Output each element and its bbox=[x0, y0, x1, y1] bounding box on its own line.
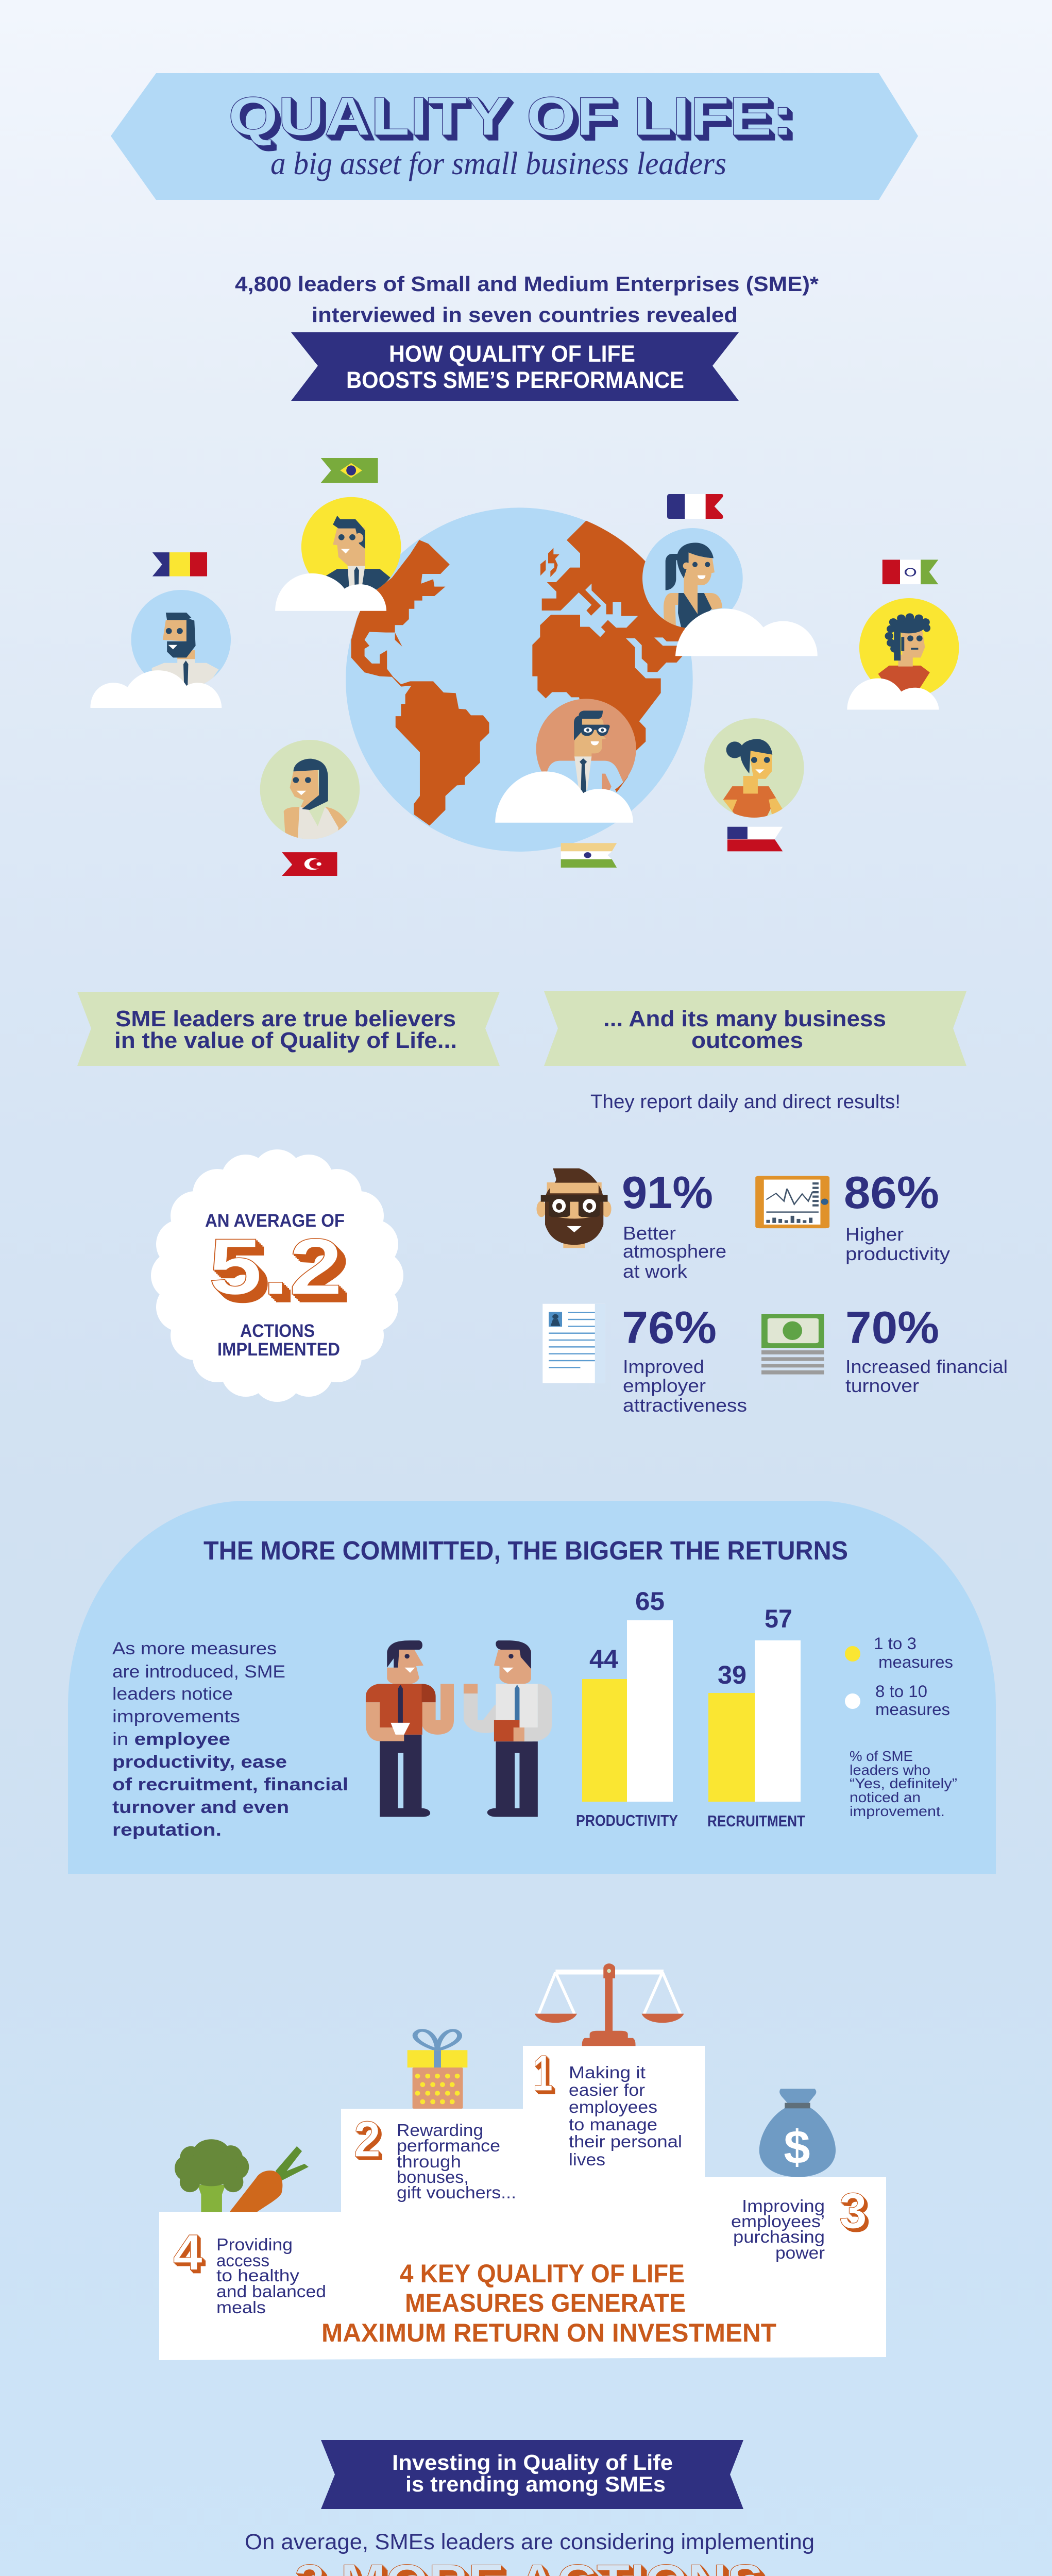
measure 3 text: employees’ bbox=[731, 2212, 825, 2231]
ribbon: how quality of life boosts performance bbox=[291, 332, 739, 401]
stat: 70% increased financial turnover: turnover bbox=[845, 1375, 919, 1396]
icon: money bag bbox=[759, 2089, 836, 2177]
banner: SME leaders are true believers: SME leaders are true believers bbox=[115, 1006, 456, 1031]
ribbon: investing in quality of life: Investing in Quality of Life bbox=[392, 2450, 673, 2475]
body text: reputation. bbox=[112, 1820, 222, 1840]
trend statement: On average, SMEs leaders are considering implementing bbox=[245, 2530, 815, 2554]
numeral 1: 1 bbox=[533, 2045, 553, 2102]
bar chart: 44 bbox=[589, 1645, 618, 1673]
bar chart: 57 bbox=[765, 1604, 792, 1633]
stat: 91% better atmosphere: at work bbox=[623, 1261, 688, 1282]
measure 1 text: their personal bbox=[569, 2132, 682, 2151]
legend bbox=[845, 1634, 953, 1719]
intro text: interviewed in seven countries revealed bbox=[312, 303, 738, 327]
flag: Mexico bbox=[883, 560, 938, 584]
intro text: 4,800 leaders of Small and Medium Enterprises (SME)* bbox=[235, 272, 819, 296]
ribbon: investing in quality of life bbox=[321, 2440, 743, 2509]
icon: banknote and stack bbox=[761, 1314, 824, 1375]
legend: measures bbox=[875, 1700, 950, 1719]
podium headline: 4 KEY QUALITY OF LIFE bbox=[400, 2259, 685, 2288]
icon: gift box bbox=[408, 2030, 467, 2109]
panel heading: THE MORE COMMITTED, THE BIGGER THE RETURNS bbox=[203, 1536, 848, 1565]
portrait: India bbox=[495, 699, 636, 868]
stat: 70% increased financial turnover bbox=[845, 1302, 1008, 1396]
bar chart bbox=[576, 1587, 805, 1830]
flag: Turkey bbox=[282, 852, 337, 876]
cloud bbox=[91, 670, 222, 708]
body text: improvements bbox=[112, 1707, 240, 1726]
measure 2 text: through bbox=[397, 2152, 461, 2171]
stat: 76% improved employer attractiveness: Improved bbox=[623, 1356, 704, 1377]
cloud badge: 5.2 actions implemented: IMPLEMENTED bbox=[217, 1340, 340, 1360]
banner: and its many business outcomes: ... And its many business bbox=[603, 1006, 886, 1031]
measure 2 text bbox=[397, 2121, 516, 2202]
chart note: noticed an bbox=[850, 1789, 921, 1805]
portrait: Romania bbox=[91, 552, 231, 708]
body text: As more measures bbox=[112, 1639, 277, 1658]
numeral 2: 2 bbox=[354, 2111, 381, 2167]
banner: SME leaders are true believers: in the value of Quality of Life... bbox=[114, 1028, 457, 1053]
icon: tablet with chart bbox=[755, 1176, 829, 1228]
body text: turnover and even bbox=[112, 1798, 289, 1817]
measure 3 text: power bbox=[775, 2243, 825, 2262]
globe bbox=[346, 507, 693, 852]
icon: bearded man with glasses bbox=[536, 1168, 612, 1248]
portrait: Brazil bbox=[275, 458, 401, 611]
banner: and its many business outcomes: outcomes bbox=[691, 1028, 803, 1053]
stat: 91% better atmosphere: atmosphere bbox=[623, 1241, 726, 1262]
portrait: Chile bbox=[704, 718, 804, 851]
legend: 8 to 10 bbox=[875, 1682, 927, 1701]
portrait: Mexico bbox=[847, 560, 959, 709]
flag: France bbox=[667, 494, 723, 519]
stat: 86% higher productivity: Higher bbox=[845, 1224, 904, 1245]
measure 2 text: bonuses, bbox=[397, 2167, 469, 2187]
body text: are introduced, SME bbox=[112, 1662, 285, 1682]
stat: 76% improved employer attractiveness: 76% bbox=[622, 1302, 717, 1353]
chart note: % of SME bbox=[850, 1748, 913, 1764]
banner: and its many business outcomes bbox=[544, 991, 966, 1066]
numeral 4: 4 bbox=[173, 2224, 202, 2281]
podium headline: MEASURES GENERATE bbox=[405, 2289, 686, 2317]
chart note: “Yes, definitely” bbox=[850, 1775, 957, 1791]
banner: SME leaders are true believers bbox=[77, 992, 500, 1066]
measure 1 text: employees bbox=[569, 2097, 657, 2116]
body text: leaders notice bbox=[112, 1684, 233, 1704]
body text: of recruitment, financial bbox=[112, 1775, 348, 1794]
figure: 5.2: 5.2 bbox=[209, 1222, 343, 1311]
stat: 86% higher productivity: 86% bbox=[844, 1167, 939, 1218]
measure 4 text: to healthy bbox=[216, 2266, 300, 2285]
left man bbox=[366, 1640, 454, 1817]
subtitle: a big asset for small business leaders bbox=[270, 146, 726, 181]
podium headline bbox=[321, 2259, 776, 2347]
stat: 76% improved employer attractiveness: employer bbox=[623, 1375, 706, 1396]
chart note bbox=[850, 1748, 957, 1819]
title banner bbox=[111, 73, 918, 200]
illustration: two businessmen bbox=[366, 1640, 552, 1817]
flag: Romania bbox=[152, 552, 207, 577]
ribbon: how quality of life boosts performance: HOW QUALITY OF LIFE bbox=[389, 341, 635, 367]
measure 1 text: easier for bbox=[569, 2080, 645, 2099]
legend: 1 to 3 bbox=[874, 1634, 917, 1653]
flag: Chile bbox=[727, 827, 783, 851]
stat: 76% improved employer attractiveness: attractiveness bbox=[623, 1395, 747, 1416]
bar chart: 39 bbox=[718, 1660, 746, 1689]
measure 3 text: purchasing bbox=[733, 2227, 825, 2246]
stat: 91% better atmosphere bbox=[622, 1167, 726, 1282]
bar chart: RECRUITMENT bbox=[707, 1812, 805, 1830]
world map with seven country portraits bbox=[91, 458, 959, 876]
stat: 91% better atmosphere: Better bbox=[623, 1223, 676, 1244]
measure 4 text bbox=[216, 2235, 326, 2317]
measure 2 text: gift vouchers... bbox=[397, 2183, 516, 2202]
legend: measures bbox=[878, 1653, 953, 1671]
measure 1 text: lives bbox=[569, 2150, 605, 2169]
cloud bbox=[275, 573, 386, 611]
measure 4 text: access bbox=[216, 2251, 269, 2270]
stat: 86% higher productivity bbox=[844, 1167, 950, 1264]
stat: 76% improved employer attractiveness bbox=[622, 1302, 747, 1416]
stat: 70% increased financial turnover: 70% bbox=[845, 1302, 939, 1353]
intro text bbox=[235, 272, 819, 327]
body text: productivity, ease bbox=[112, 1752, 287, 1772]
bar chart: PRODUCTIVITY bbox=[576, 1811, 678, 1829]
icon: scales bbox=[535, 1963, 684, 2046]
chart note: improvement. bbox=[850, 1803, 945, 1819]
measure 1 text: to manage bbox=[569, 2115, 657, 2134]
cloud bbox=[847, 679, 939, 709]
flag: Brazil bbox=[321, 458, 378, 483]
cloud bbox=[495, 771, 633, 823]
measure 3 text bbox=[731, 2196, 825, 2262]
bar chart: 65 bbox=[635, 1587, 665, 1616]
measure 4 text: meals bbox=[216, 2298, 266, 2317]
cloud badge: 5.2 actions implemented: ACTIONS bbox=[240, 1321, 315, 1341]
ribbon: investing in quality of life: is trending among SMEs bbox=[405, 2472, 666, 2496]
title: Quality of Life: QUALITY OF LIFE: bbox=[228, 86, 793, 147]
measure 1 text: Making it bbox=[569, 2063, 646, 2082]
ribbon: how quality of life boosts performance: BOOSTS SME’S PERFORMANCE bbox=[346, 367, 684, 393]
measure 3 text: Improving bbox=[742, 2196, 825, 2215]
chart note: leaders who bbox=[850, 1762, 930, 1778]
podium: four key measures bbox=[159, 1963, 886, 2360]
subheading: they report results: They report daily and direct results! bbox=[590, 1091, 901, 1113]
cloud badge: 5.2 actions implemented: AN AVERAGE OF bbox=[205, 1211, 345, 1231]
icon: resume document bbox=[542, 1304, 605, 1383]
podium headline: MAXIMUM RETURN ON INVESTMENT bbox=[321, 2318, 776, 2347]
numeral 3: 3 bbox=[839, 2182, 867, 2239]
portrait: Turkey bbox=[260, 740, 360, 876]
cloud bbox=[675, 608, 818, 656]
flag: India bbox=[561, 843, 617, 868]
measure 2 text: performance bbox=[397, 2136, 500, 2155]
cloud badge: 5.2 actions implemented bbox=[151, 1149, 403, 1402]
measure 2 text: Rewarding bbox=[397, 2121, 483, 2140]
body text bbox=[112, 1639, 348, 1840]
icon: broccoli and carrot bbox=[175, 2139, 309, 2212]
right man bbox=[464, 1640, 552, 1817]
body text: in employee bbox=[112, 1730, 230, 1749]
measure 4 text: and balanced bbox=[216, 2282, 326, 2301]
stat: 70% increased financial turnover: Increased financial bbox=[845, 1356, 1008, 1377]
stat: 86% higher productivity: productivity bbox=[845, 1243, 950, 1264]
stat: 91% better atmosphere: 91% bbox=[622, 1167, 713, 1218]
portrait: France bbox=[642, 494, 818, 656]
panel: the more committed, the bigger the returns bbox=[68, 1501, 996, 1874]
icon: money bag: $ bbox=[784, 2121, 810, 2174]
measure 1 text bbox=[569, 2063, 682, 2169]
measure 4 text: Providing bbox=[216, 2235, 293, 2254]
